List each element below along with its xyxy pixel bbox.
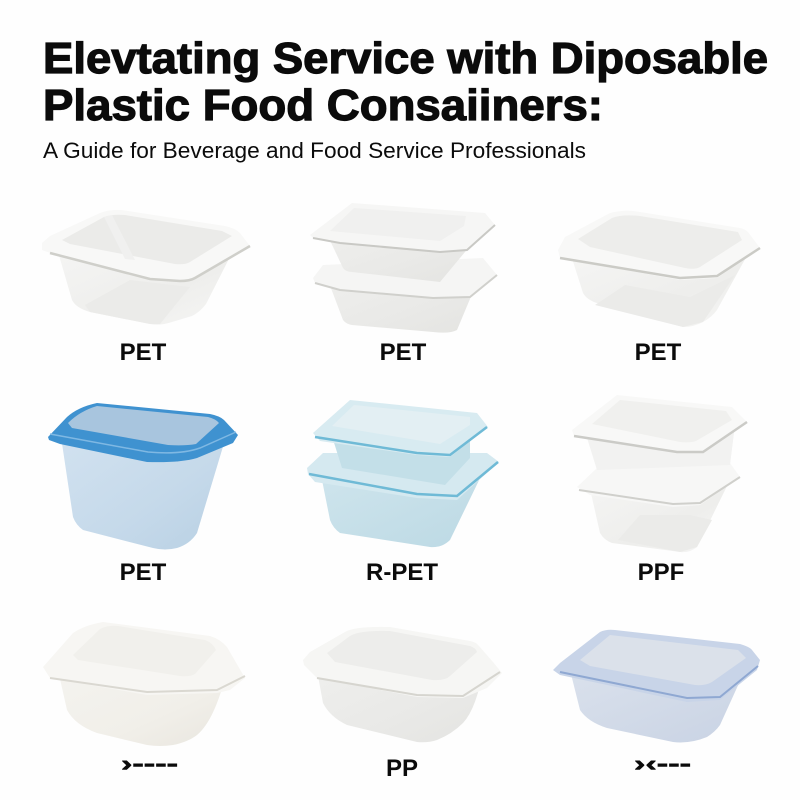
container lid [303, 627, 502, 698]
panel: clear PET container, row 1 left [42, 210, 250, 366]
title: Plastic Food Consaiiners: [43, 81, 603, 130]
upper container lid [310, 203, 495, 252]
label: PP [386, 755, 418, 782]
upper container lid [313, 400, 488, 457]
container lid [553, 630, 760, 702]
upper container body [583, 425, 735, 470]
label: PET [380, 339, 427, 366]
lower container lid [577, 463, 740, 507]
panel: periwinkle container, row 3 right [553, 630, 760, 776]
panel: blue PET container, row 2 left [48, 403, 238, 586]
lower container lid [313, 258, 497, 298]
panel: white container, row 3 centre [303, 627, 502, 782]
lower container body [320, 470, 484, 547]
container body [58, 670, 227, 746]
container body [570, 670, 745, 742]
lower container body [326, 275, 480, 333]
upper container lid [572, 395, 747, 452]
upper container body [326, 232, 475, 282]
label: PET [635, 339, 682, 366]
container body [60, 430, 228, 550]
container lid [43, 622, 245, 695]
blue lid [48, 403, 238, 462]
container lid [42, 210, 250, 281]
label: PET [120, 339, 167, 366]
lower container body [588, 480, 730, 552]
label: PPF [638, 559, 684, 586]
title [43, 34, 768, 130]
panel: stacked PET containers, row 1 centre [310, 203, 497, 366]
container body [316, 665, 484, 742]
lower container lid [307, 453, 499, 500]
panel: aqua R-PET containers, row 2 centre [307, 400, 499, 586]
container body [56, 245, 236, 325]
upper container body [330, 430, 470, 485]
subtitle: A Guide for Beverage and Food Service Professionals [43, 138, 586, 163]
label: R-PET [366, 559, 438, 586]
container lid [558, 211, 760, 280]
label: garbled glyphs: ›‹--- [634, 751, 691, 776]
label: PET [120, 559, 167, 586]
panel: clear PET container, row 1 right [558, 211, 760, 366]
label: garbled glyphs: ›---- [121, 751, 178, 776]
panel: clear PPF containers, row 2 right [572, 395, 747, 586]
panel: white container, row 3 left [43, 622, 245, 776]
container body [570, 252, 749, 327]
title: Elevtating Service with Diposable [43, 34, 768, 83]
